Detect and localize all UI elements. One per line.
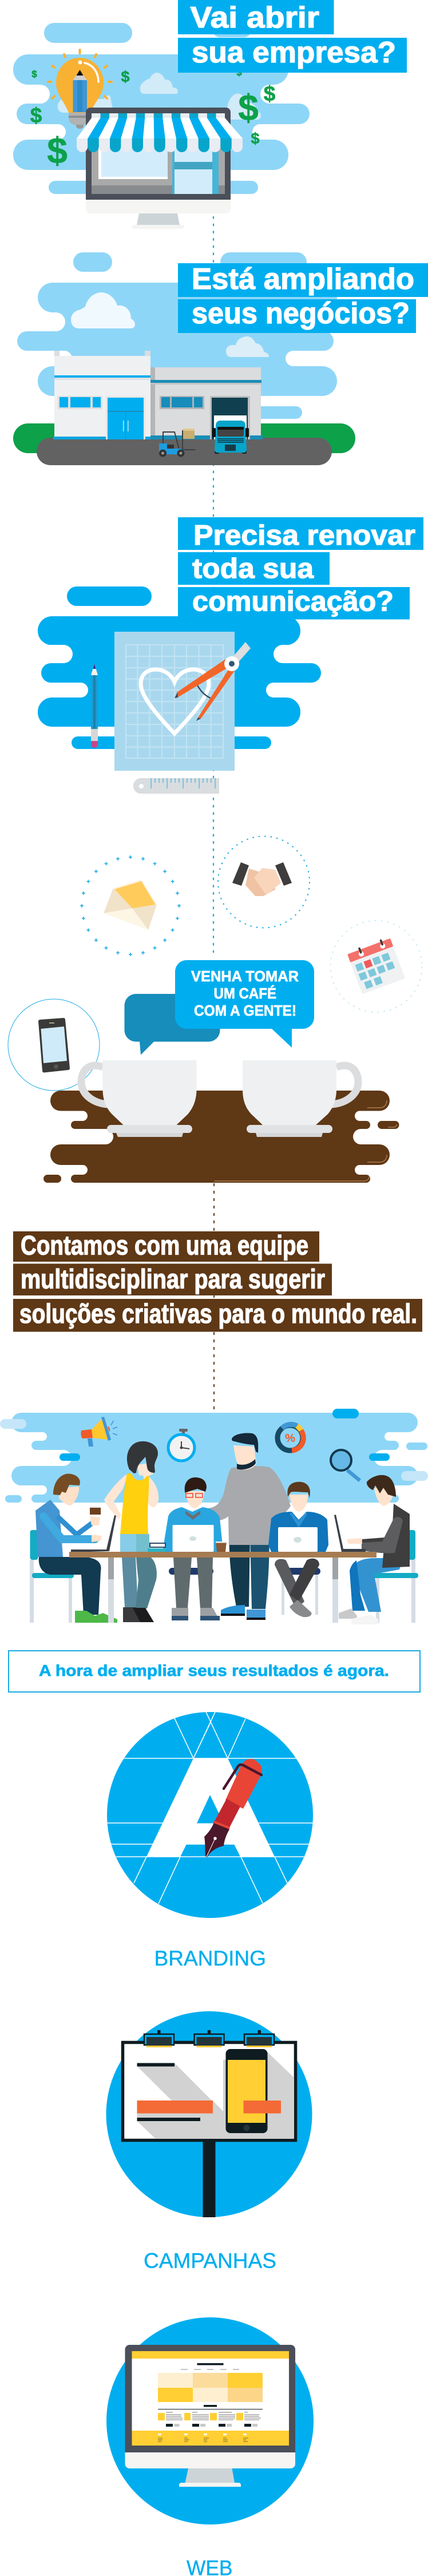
heading: Precisa renovar toda sua comunicação?: toda sua: [192, 553, 314, 584]
heading: Está ampliando seus negócios?: [178, 263, 428, 333]
label: BRANDING: BRANDING: [154, 1947, 266, 1970]
icon: forklift with box: [159, 429, 195, 457]
heading: Está ampliando seus negócios?: seus negócios?: [192, 297, 410, 330]
icon: pencil: [91, 664, 98, 748]
building: office: [53, 351, 152, 439]
icon: stopwatch: [168, 1429, 195, 1461]
icon: billboard circle: [106, 2011, 312, 2217]
icon: magnifier: [331, 1450, 361, 1482]
dollar signs: $: [264, 82, 276, 105]
heading: Precisa renovar toda sua comunicação?: Precisa renovar: [193, 520, 415, 551]
connector dotted line: blue: [213, 216, 214, 957]
connector dotted line: brown: [213, 1183, 215, 1413]
awning: [77, 113, 243, 152]
background sky shapes: [0, 23, 340, 194]
chairs: [30, 1530, 418, 1623]
icon: left coffee cup: [81, 1060, 197, 1137]
speech bubble: dark: [125, 994, 220, 1055]
heading: Vai abrir sua empresa?: Vai abrir: [190, 1, 319, 34]
icon: heart outline: [141, 669, 209, 734]
icon: phone in circle: [8, 999, 100, 1091]
icon: envelope in plus-mark circle: [80, 855, 181, 956]
person: seated man with coffee: [35, 1474, 117, 1623]
background blue shapes: [0, 586, 354, 749]
speech bubble: Venha tomar um café com a gente: COM A GENTE!: [194, 1002, 296, 1019]
blueprint board with grid: [114, 632, 235, 771]
speech bubble: Venha tomar um café com a gente: UM CAFÉ: [214, 985, 276, 1002]
dollar signs: $: [238, 87, 259, 128]
icon: calendar in dashed circle: [331, 921, 422, 1012]
books and coffee cup on table: [148, 1541, 227, 1552]
icon: logo construction circle: [107, 1712, 313, 1918]
sky shapes: [0, 1409, 428, 1503]
scene: new business storefront: [0, 0, 407, 229]
heading: Precisa renovar toda sua comunicação?: [178, 517, 423, 619]
table: [69, 1552, 377, 1623]
clouds: [58, 73, 261, 120]
call to action box: A hora de ampliar seus resultados é agora.: [39, 1662, 389, 1679]
heading: team statement: multidisciplinar para sugerir: [21, 1263, 325, 1294]
background sky shapes: [0, 252, 371, 419]
dollar signs: [30, 67, 276, 171]
heading: Vai abrir sua empresa?: [178, 0, 407, 73]
coffee spill: [0, 1091, 428, 1183]
building: warehouse: [150, 367, 263, 439]
icon: storefront in monitor: [77, 108, 243, 229]
icon: truck: [212, 421, 249, 454]
dollar signs: $: [121, 68, 130, 85]
icon: percentage donut: %: [285, 1432, 295, 1445]
person: seated man in blue: [268, 1482, 328, 1617]
service: campaigns: [106, 2011, 312, 2273]
clouds: [71, 292, 269, 357]
heading: Está ampliando seus negócios?: Está ampliando: [192, 263, 414, 296]
ground and road: [13, 423, 355, 465]
speech bubble: Venha tomar um café com a gente: VENHA TOMAR: [191, 968, 299, 985]
call to action box: [9, 1651, 420, 1692]
icon: fountain pen: [204, 1759, 262, 1857]
person: standing man in grey: [206, 1433, 291, 1620]
dollar signs: $: [31, 69, 37, 80]
dollar signs: $: [236, 67, 242, 78]
dollar signs: $: [251, 130, 260, 147]
icon: megaphone: [81, 1417, 117, 1446]
person: woman in yellow: [104, 1441, 158, 1622]
icon: handshake in dotted circle: [218, 837, 310, 928]
service: branding: [107, 1712, 313, 1970]
scene: contact icons and coffee: [0, 837, 428, 1183]
coffee highlights: [214, 1100, 397, 1181]
icon: ruler: [133, 778, 219, 794]
dollar signs: $: [47, 130, 68, 171]
icon: billboard lamps: [144, 2030, 274, 2047]
person: seated man in dark sweater: [334, 1475, 410, 1624]
heading: team statement: Contamos com uma equipe: [21, 1230, 308, 1260]
heading: team statement: [13, 1230, 422, 1332]
label: CAMPANHAS: CAMPANHAS: [144, 2249, 276, 2273]
dollar signs: $: [30, 104, 42, 127]
icon: right coffee cup: [243, 1060, 358, 1137]
person: seated man with glasses: [163, 1477, 223, 1620]
scene: renewing communication blueprint: [0, 517, 423, 794]
speech bubble: Venha tomar um café com a gente: [175, 960, 314, 1048]
service: web: [106, 2317, 314, 2576]
icon: website monitor circle: [106, 2317, 314, 2525]
icon: light bulb with pencil: [48, 50, 112, 129]
scene: team around the table: [0, 1409, 428, 1624]
icon: percentage donut: [278, 1424, 303, 1451]
heading: Vai abrir sua empresa?: sua empresa?: [192, 36, 396, 69]
heading: Precisa renovar toda sua comunicação?: comunicação?: [192, 586, 394, 617]
icon: compass: [175, 642, 251, 721]
scene: expanding business warehouse: [0, 252, 428, 465]
